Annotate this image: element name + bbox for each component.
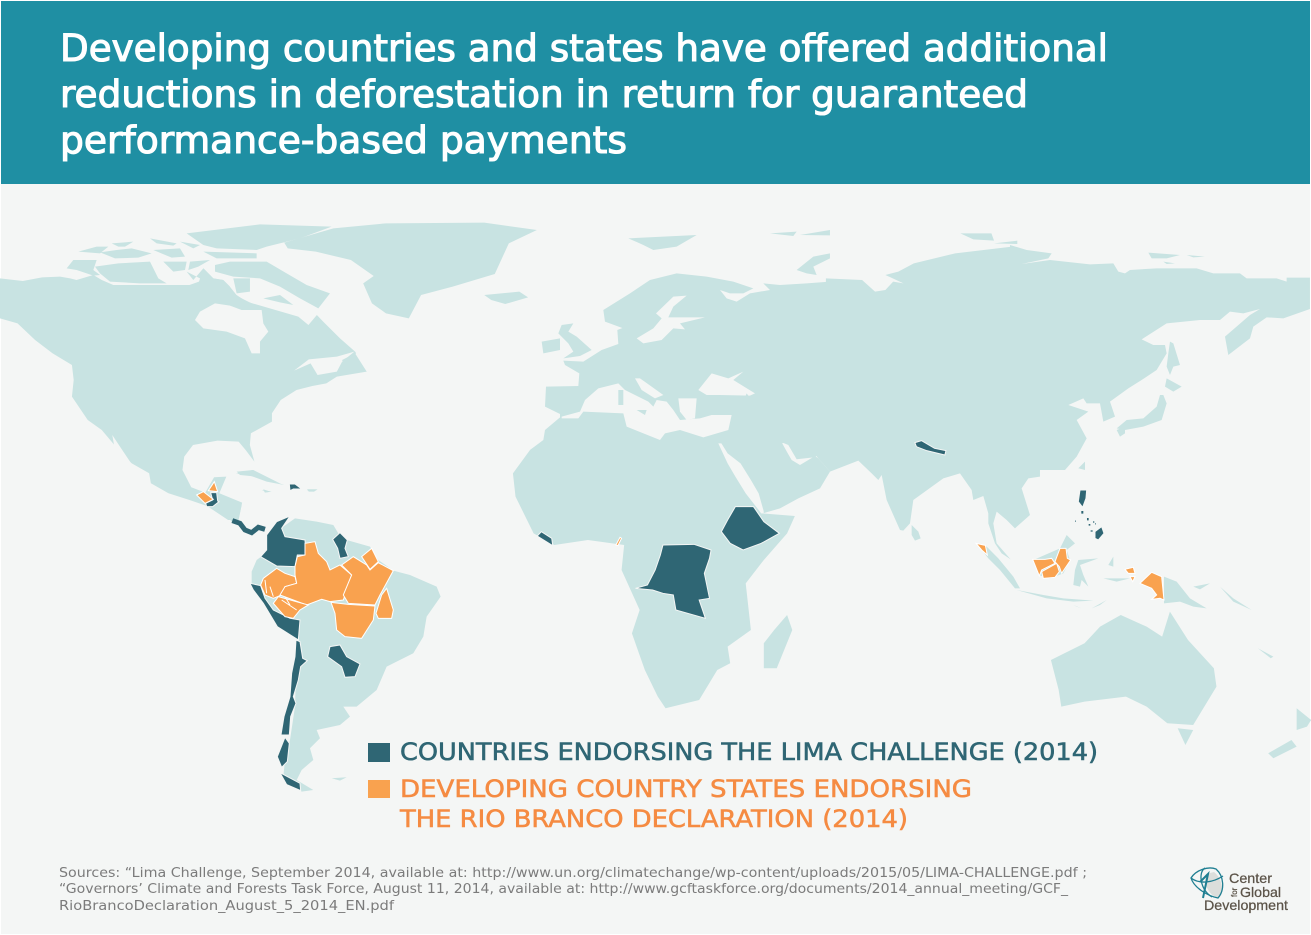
sources: “Governors’ Climate and Forests Task Force, August 11, 2014, available at: http://www.gcftaskforce.org/documents/2014_annual_meeting/GCF_ xyxy=(59,881,1068,897)
East Asia and Japan xyxy=(1010,245,1310,470)
Lima Challenge countries, Africa and Nepal xyxy=(537,441,946,618)
title: Developing countries and states have offered additional xyxy=(60,27,1108,70)
legend: Rio Branco label: DEVELOPING COUNTRY STATES ENDORSING xyxy=(400,775,972,803)
header banner xyxy=(1,1,1310,184)
title: reductions in deforestation in return for guaranteed xyxy=(60,73,1028,116)
North America and Greenland xyxy=(0,223,537,520)
Rio Branco states, Americas xyxy=(197,482,393,638)
South Asia and Arabia xyxy=(725,310,1040,559)
logo wordmark: for xyxy=(1230,887,1239,897)
Rio Branco state, Nigeria xyxy=(616,537,622,546)
sources: Sources: “Lima Challenge, September 2014, available at: http://www.un.org/climatechange/wp-content/uploads/2015/05/LIMA-CHALLENGE.pdf ; xyxy=(59,865,1087,881)
Rio Branco states, Indonesia xyxy=(976,543,1164,600)
logo globe icon xyxy=(1191,868,1223,898)
Africa and Australia xyxy=(513,440,1311,758)
Central Eurasia xyxy=(826,233,1017,400)
Europe, North Africa and Middle East xyxy=(530,230,830,470)
sources: RioBrancoDeclaration_August_5_2014_EN.pdf xyxy=(59,898,395,914)
sources xyxy=(59,865,1087,914)
logo wordmark: Center xyxy=(1229,870,1272,886)
world map xyxy=(0,223,1311,792)
logo wordmark: Development xyxy=(1204,897,1288,913)
legend xyxy=(368,738,1098,833)
Lima Challenge countries, Americas xyxy=(206,484,360,791)
title xyxy=(60,27,1108,162)
legend: Lima Challenge swatch xyxy=(368,743,390,762)
logo wordmark: Global xyxy=(1240,884,1281,900)
logo wordmark xyxy=(1204,870,1288,913)
logo: Center for Global Development xyxy=(1191,868,1288,913)
legend: Lima Challenge label: COUNTRIES ENDORSING THE LIMA CHALLENGE (2014) xyxy=(400,738,1098,766)
Lima Challenge country, Philippines xyxy=(1075,490,1104,540)
legend: Rio Branco swatch xyxy=(368,780,390,798)
legend: Rio Branco label: THE RIO BRANCO DECLARATION (2014) xyxy=(399,805,908,833)
South America and Central America xyxy=(197,470,441,792)
Southeast Asia and New Guinea xyxy=(976,490,1252,610)
Canadian Arctic and Hudson Bay xyxy=(67,224,332,353)
legend: Rio Branco label xyxy=(399,775,972,833)
title: performance-based payments xyxy=(60,119,627,162)
